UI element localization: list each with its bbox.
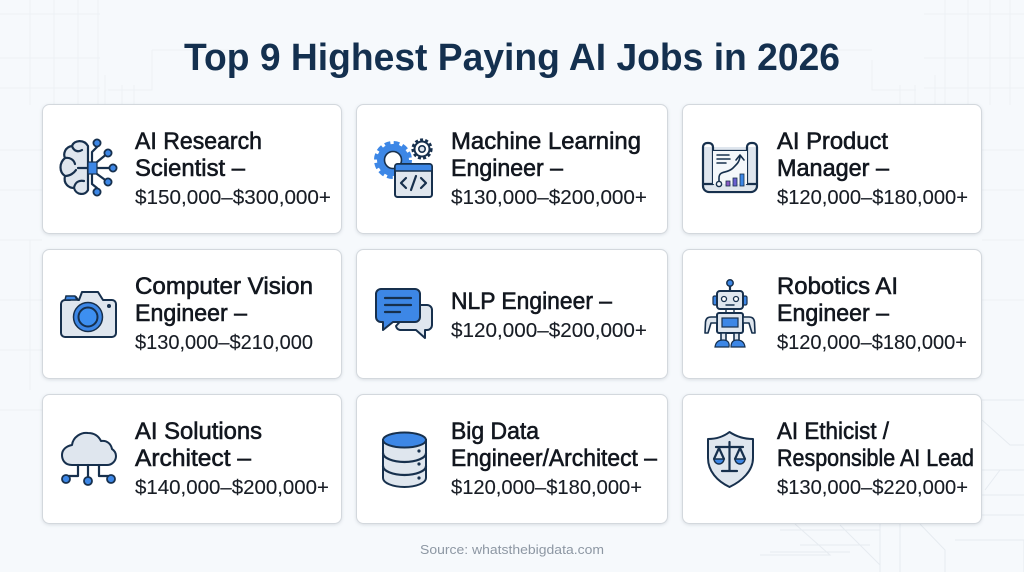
icon: camera: [61, 292, 116, 337]
text: AI Product Manager: $120,000–$180,000+: [777, 187, 968, 209]
source note: Source: whatsthebigdata.com: [420, 542, 604, 557]
text: Computer Vision Engineer: $130,000–$210,000: [135, 332, 313, 354]
text: Big Data Engineer/Architect: $120,000–$180,000+: [451, 477, 642, 499]
text: Computer Vision Engineer: Computer Vision: [135, 273, 313, 300]
panel: AI Ethicist / Responsible AI Lead: [682, 394, 982, 524]
text: AI Research Scientist: AI Research: [135, 128, 262, 155]
text: AI Product Manager: [777, 128, 968, 209]
text: AI Ethicist / Responsible AI Lead: $130,000–$220,000+: [777, 477, 968, 499]
text: Big Data Engineer/Architect: [451, 418, 658, 499]
icon: robot: [705, 280, 755, 347]
text: Robotics AI Engineer: Engineer –: [777, 300, 890, 327]
icon: shield with scales: [708, 432, 753, 487]
panel: Big Data Engineer/Architect: [356, 394, 668, 524]
text: Robotics AI Engineer: [777, 273, 967, 354]
icon: brain with circuit: [60, 139, 117, 196]
icon: gears and code window: [376, 140, 432, 197]
text: AI Product Manager: Manager –: [777, 155, 890, 182]
panel: Computer Vision Engineer: [42, 250, 342, 378]
panel: AI Solutions Architect: [42, 394, 342, 524]
panel: AI Research Scientist: [42, 104, 342, 234]
text: AI Research Scientist: Scientist –: [135, 155, 246, 182]
text: Machine Learning Engineer: Engineer –: [451, 155, 564, 182]
text: NLP Engineer: $120,000–$200,000+: [451, 320, 647, 342]
title: Top 9 Highest Paying AI Jobs in 2026: [184, 37, 840, 79]
text: AI Ethicist / Responsible AI Lead: Responsible AI Lead: [777, 445, 974, 472]
text: Robotics AI Engineer: $120,000–$180,000+: [777, 332, 967, 354]
text: AI Solutions Architect: [135, 418, 329, 499]
text: Computer Vision Engineer: Engineer –: [135, 300, 248, 327]
text: Computer Vision Engineer: [135, 273, 313, 354]
text: AI Ethicist / Responsible AI Lead: AI Ethicist /: [777, 418, 889, 445]
panel: Machine Learning Engineer: [356, 104, 668, 234]
panel: AI Product Manager: [682, 104, 982, 234]
icon: roadmap scroll with chart: [703, 143, 757, 192]
text: AI Research Scientist: [135, 128, 331, 209]
text: Big Data Engineer/Architect: Big Data: [451, 418, 540, 445]
text: AI Solutions Architect: $140,000–$200,000+: [135, 477, 329, 499]
panel: Robotics AI Engineer: [682, 250, 982, 378]
text: AI Research Scientist: $150,000–$300,000+: [135, 187, 331, 209]
text: Big Data Engineer/Architect: Engineer/Architect –: [451, 445, 658, 472]
text: NLP Engineer: NLP Engineer –: [451, 288, 613, 315]
icon: database: [383, 432, 426, 487]
text: AI Ethicist / Responsible AI Lead: [777, 418, 974, 499]
icon: chat bubbles: [376, 289, 432, 338]
text: Machine Learning Engineer: $130,000–$200,000+: [451, 187, 647, 209]
icon: cloud network: [62, 433, 116, 485]
text: NLP Engineer: [451, 288, 647, 342]
text: AI Solutions Architect: Architect –: [135, 445, 252, 472]
text: AI Solutions Architect: AI Solutions: [135, 418, 262, 445]
text: AI Product Manager: AI Product: [777, 128, 888, 155]
text: Machine Learning Engineer: [451, 128, 647, 209]
text: Machine Learning Engineer: Machine Learning: [451, 128, 641, 155]
text: Robotics AI Engineer: Robotics AI: [777, 273, 898, 300]
panel: NLP Engineer: [356, 250, 668, 378]
